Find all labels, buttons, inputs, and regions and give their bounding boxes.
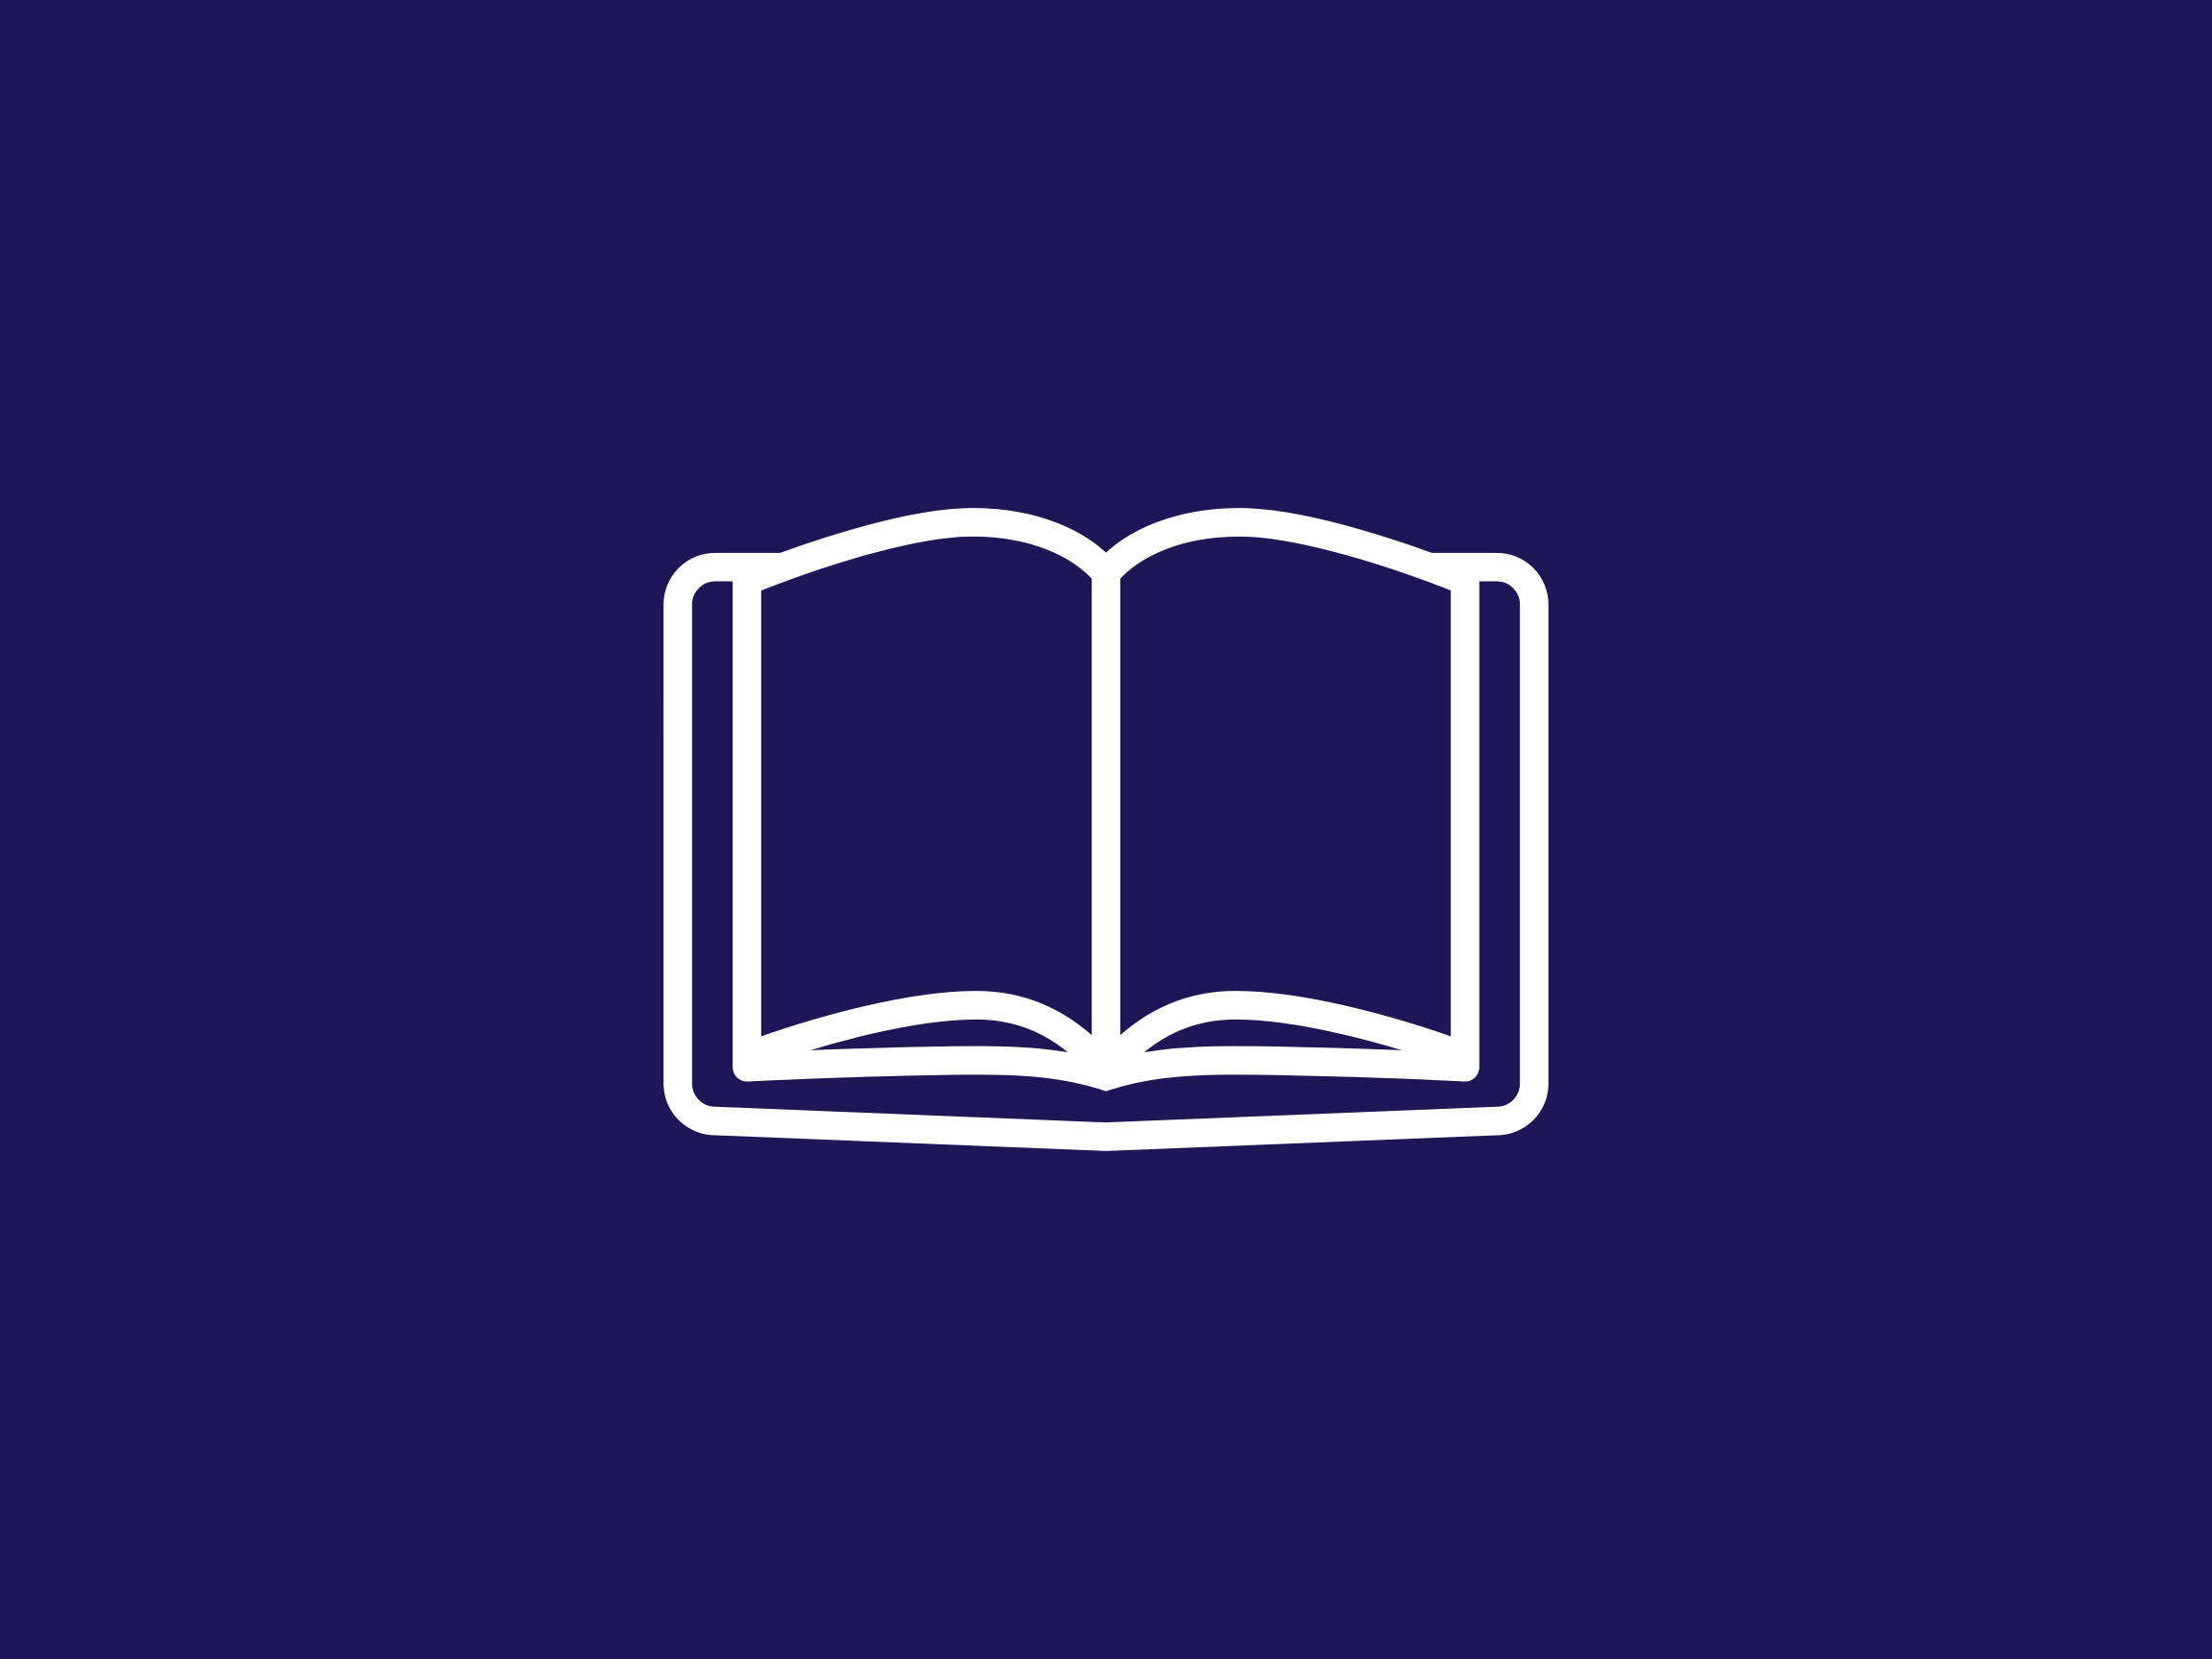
icon: open book	[678, 522, 1534, 1137]
right page edge	[1451, 568, 1479, 1068]
book cover outline	[678, 567, 1534, 1137]
left page edge	[733, 568, 761, 1068]
bottom page block	[747, 1060, 1465, 1076]
spine	[1092, 572, 1120, 1076]
top page curves	[747, 522, 1465, 581]
lower page curves	[747, 1005, 1465, 1070]
